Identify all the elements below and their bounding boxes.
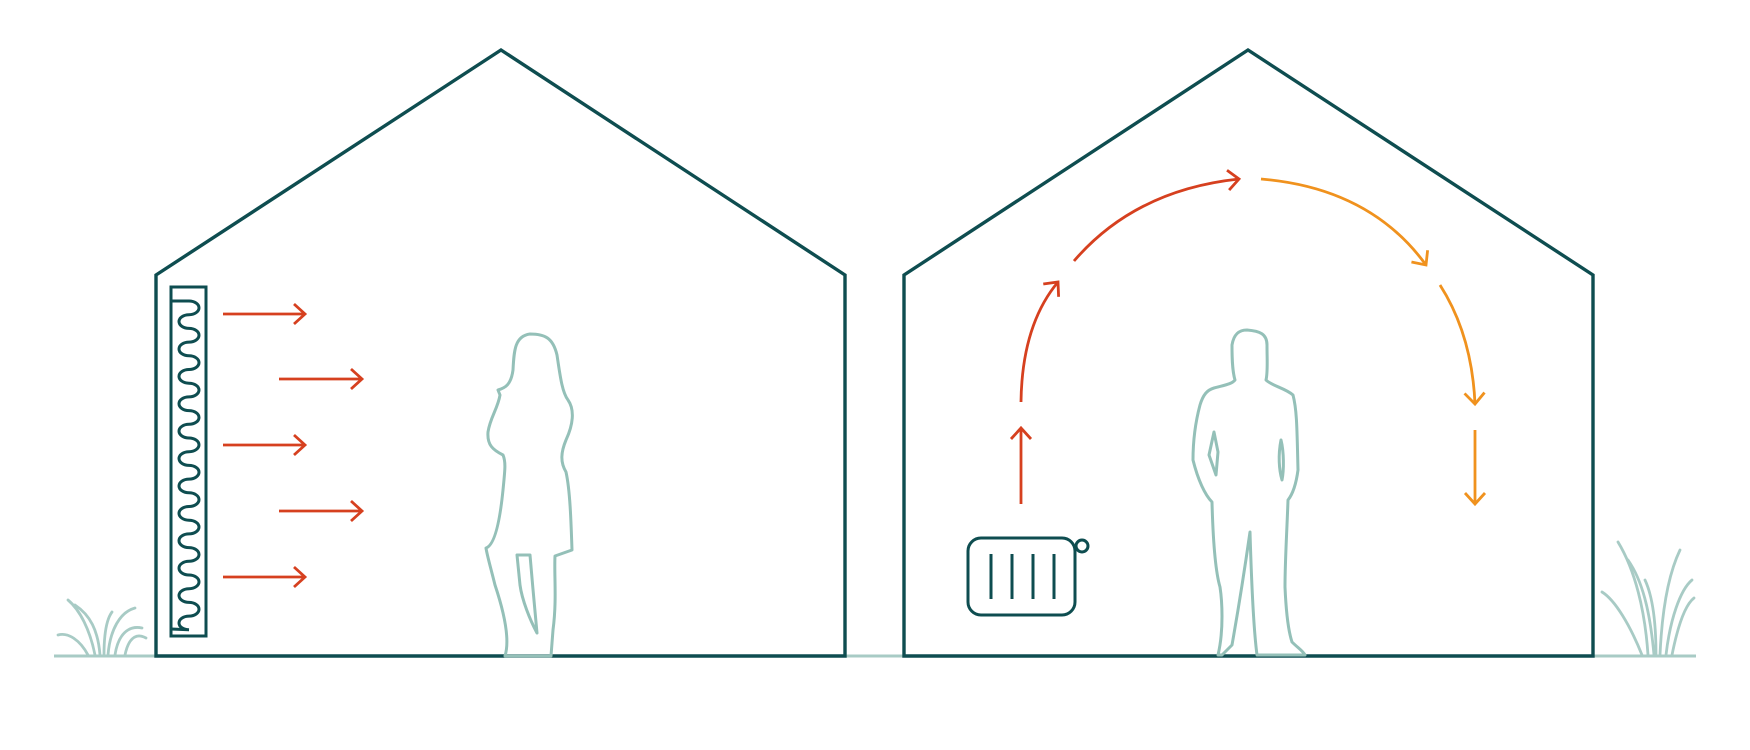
grass left (58, 600, 146, 655)
woman silhouette (486, 334, 572, 656)
radiant heat arrows (223, 314, 362, 577)
man silhouette (1193, 330, 1305, 655)
convection arrows (1021, 179, 1475, 504)
grass right (1602, 542, 1694, 655)
ground line (54, 654, 1696, 658)
house right (904, 50, 1593, 656)
infrared heating panel (171, 287, 206, 636)
radiator (968, 538, 1088, 615)
house left (156, 50, 845, 656)
